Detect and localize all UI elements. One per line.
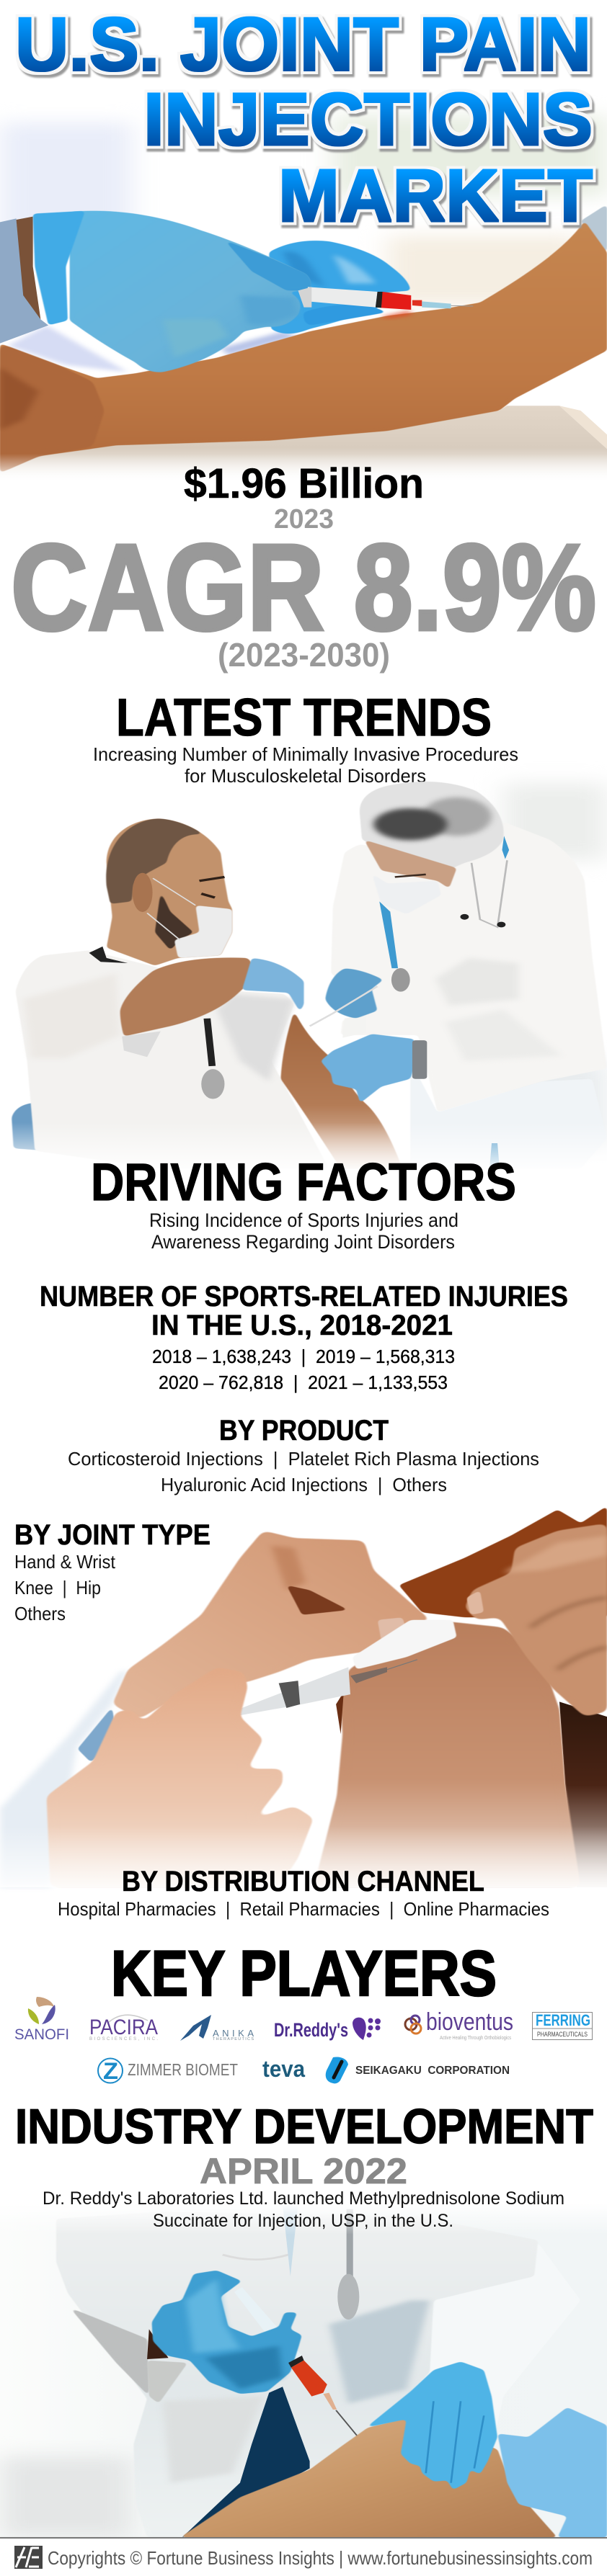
logo: Anika: ANIKA [213,2028,254,2039]
logo: Bioventus: bioventus [426,2008,513,2036]
icon: Fortune Business Insights logo [14,2546,43,2569]
heading: key players: KEY PLAYERS [111,1937,497,2009]
logo: Sanofi: SANOFI [14,2026,69,2043]
latest trends text: Increasing Number of Minimally Invasive Procedures [93,743,518,765]
heading: by joint type: BY JOINT TYPE [14,1519,211,1551]
logo: Sanofi [14,1997,69,2043]
joint type: knee and hip: Knee | Hip [14,1577,101,1598]
forecast period: (2023-2030) [218,636,390,674]
logo: Seikagaku [326,2057,510,2083]
joint type: hand and wrist: Hand & Wrist [14,1551,116,1573]
logo: Ferring: FERRING [536,2011,590,2029]
photo: knee injection [0,2204,607,2539]
development description: Dr. Reddy's Laboratories Ltd. launched Methylprednisolone Sodium [43,2188,564,2209]
development description: Succinate for Injection, USP, in the U.S. [153,2211,453,2231]
logo: Zimmer Biomet [98,2058,238,2084]
logo: Pacira: BIOSCIENCES, INC. [89,2037,158,2041]
driving factors text [149,1209,458,1253]
latest trends text: for Musculoskeletal Disorders [185,765,426,787]
development date: APRIL 2022 [200,2151,407,2191]
heading: by product: BY PRODUCT [219,1415,389,1446]
photo: doctor vaccinating patient [0,782,607,1184]
title line 2: INJECTIONS [143,78,593,161]
by product list: Hyaluronic Acid Injections | Others [161,1474,447,1495]
footer [0,2539,607,2576]
title line 1: U.S. JOINT PAIN [15,3,591,86]
by joint type [14,1519,211,1624]
title [15,3,593,237]
logo: Ferring [532,2011,593,2040]
logo: Ferring: PHARMACEUTICALS [537,2031,588,2038]
title line 3: MARKET [278,154,593,237]
latest trends text [93,743,518,787]
joint type: others: Others [14,1603,66,1624]
distribution channel list: Hospital Pharmacies | Retail Pharmacies | Online Pharmacies [58,1898,549,1920]
hero photo: gloved hands injecting arm [0,115,607,483]
logo: Anika: THERAPEUTICS [213,2037,254,2041]
photo: injection in upper arm [0,1506,607,1887]
logo: Bioventus [405,2008,513,2041]
by product list: Corticosteroid Injections | Platelet Rich Plasma Injections [68,1448,539,1470]
heading: sports injuries statistics: IN THE U.S., 2018-2021 [151,1310,453,1341]
development description [43,2188,564,2231]
by product list [68,1448,539,1495]
logo: Anika [180,2015,254,2041]
logo: Teva: teva [262,2056,305,2082]
sports injuries values: 2018 – 1,638,243 | 2019 – 1,568,313 [152,1346,455,1367]
logo: Zimmer Biomet: Z [103,2058,118,2084]
logo: Pacira: PACIRA [89,2016,158,2039]
market size value: $1.96 Billion [184,460,424,507]
heading: latest trends: LATEST TRENDS [116,689,492,747]
base year: 2023 [274,504,334,535]
logo: Dr. Reddy's: Dr.Reddy's [274,2019,348,2041]
logo: Zimmer Biomet: ZIMMER BIOMET [128,2060,238,2079]
sports injuries values [152,1346,455,1393]
heading: sports injuries statistics [40,1281,568,1341]
heading: by distribution channel: BY DISTRIBUTION CHANNEL [122,1866,484,1897]
driving factors text: Awareness Regarding Joint Disorders [151,1231,455,1253]
logo: Seikagaku: SEIKAGAKU CORPORATION [355,2065,510,2077]
logo: Bioventus: Active Healing Through Orthobiologics [440,2036,511,2041]
heading: driving factors: DRIVING FACTORS [91,1153,516,1212]
sports injuries values: 2020 – 762,818 | 2021 – 1,133,553 [159,1372,448,1393]
driving factors text: Rising Incidence of Sports Injuries and [149,1209,458,1231]
